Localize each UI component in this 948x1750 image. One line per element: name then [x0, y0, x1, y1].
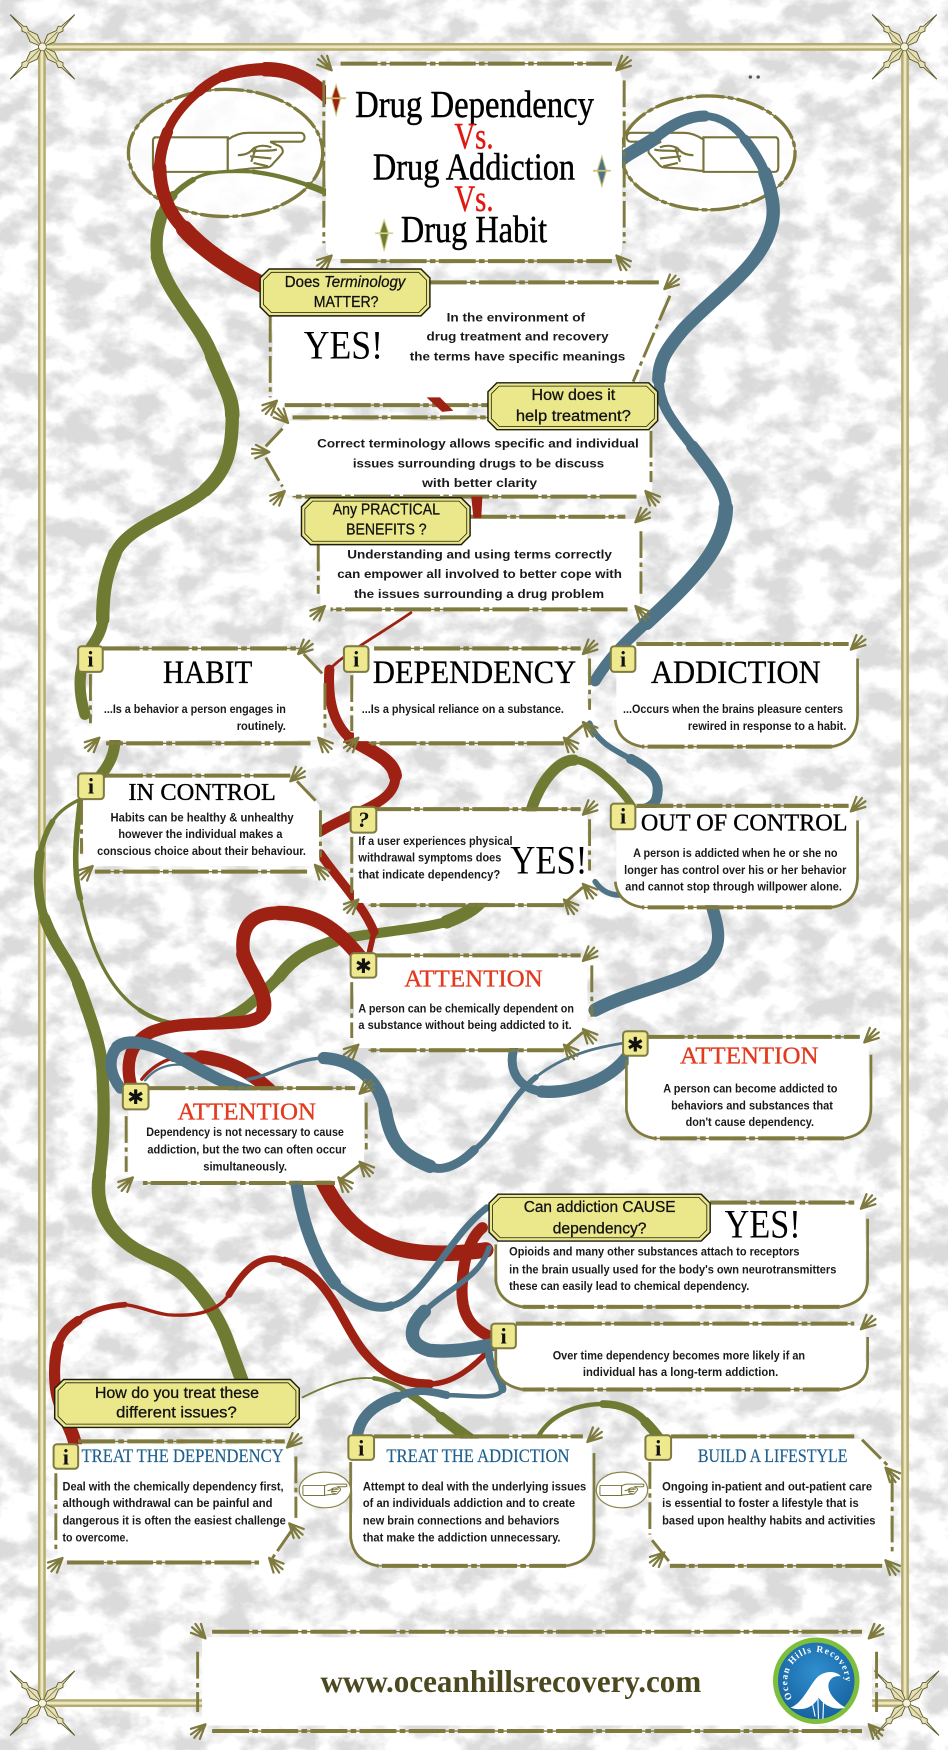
- ribbon: red dependency thread: [55, 69, 491, 1448]
- panel: treat the dependency: [48, 1433, 304, 1573]
- body text: with better clarity: [421, 477, 538, 490]
- right oval with pointing hand: [621, 96, 795, 210]
- panel: out of control: [611, 797, 865, 907]
- body text: dangerous it is often the easiest challenge: [63, 1515, 286, 1528]
- icon: title ribbon knots: [326, 85, 611, 251]
- body text: Understanding and using terms correctly: [347, 549, 612, 562]
- big yes: YES!: [510, 837, 587, 882]
- body text: [623, 703, 846, 733]
- icon: question badge: [351, 807, 376, 833]
- badge: does terminology matter: MATTER?: [314, 294, 379, 311]
- badge: can addiction cause dependency: Can addiction CAUSE: [524, 1199, 676, 1216]
- icon: info badge: i: [655, 1435, 661, 1460]
- body text: withdrawal symptoms does: [357, 852, 502, 865]
- panel: habit: [78, 640, 333, 752]
- body text: Habits can be healthy & unhealthy: [111, 811, 294, 824]
- website url: www.oceanhillsrecovery.com: [320, 1664, 701, 1699]
- logo: ocean hills recovery: Ocean Hills Recovery: [782, 1646, 850, 1700]
- badge: does terminology matter: [260, 269, 430, 316]
- body text: to overcome.: [63, 1531, 128, 1544]
- icon: info badge: [491, 1324, 516, 1349]
- body text: routinely.: [237, 720, 286, 733]
- panel: dependency: [344, 640, 597, 752]
- panel: website footer: [190, 1622, 884, 1740]
- body text: Attempt to deal with the underlying issues: [363, 1481, 587, 1494]
- icon: asterisk badge: [351, 953, 376, 978]
- icon: info badge: [54, 1444, 78, 1469]
- body text: [63, 1481, 286, 1544]
- badge: any practical benefits: [301, 498, 470, 545]
- body text: [358, 1002, 574, 1032]
- body text: although withdrawal can be painful and: [63, 1497, 272, 1510]
- badge: how do you treat: How do you treat these: [95, 1385, 259, 1402]
- body text: In the environment of: [447, 311, 585, 324]
- panel: in control: [78, 767, 329, 881]
- icon: info badge: i: [353, 646, 359, 671]
- icon: info badge: i: [620, 646, 626, 671]
- body text: individual has a long-term addiction.: [583, 1366, 778, 1379]
- body text: [624, 847, 847, 894]
- body text: can empower all involved to better cope with: [337, 568, 622, 581]
- icon: question badge: ?: [358, 807, 369, 832]
- heading: ATTENTION: [680, 1043, 819, 1070]
- heading: DEPENDENCY: [373, 655, 576, 691]
- body text: [146, 1126, 347, 1174]
- icon: info badge: [348, 1435, 374, 1460]
- badge: can addiction cause dependency: dependency?: [553, 1220, 647, 1237]
- body text: issues surrounding drugs to be discuss: [353, 458, 605, 471]
- heading: ATTENTION: [404, 966, 543, 993]
- icon: small hand left: [299, 1472, 351, 1508]
- body text: is essential to foster a lifestyle that is: [662, 1497, 859, 1510]
- body text: simultaneously.: [203, 1161, 287, 1174]
- body text: [357, 835, 513, 881]
- icon: info badge: i: [500, 1324, 507, 1349]
- body text: Dependency is not necessary to cause: [146, 1126, 344, 1139]
- panel: how does it help: [249, 408, 660, 506]
- panel: over time: [491, 1315, 875, 1390]
- icon: info badge: [344, 646, 368, 672]
- heading: ADDICTION: [651, 655, 821, 691]
- title text: [355, 84, 594, 251]
- icon: info badge: i: [88, 774, 94, 799]
- body text: [553, 1349, 805, 1379]
- body text: however the individual makes a: [118, 828, 283, 841]
- panel: can addiction cause dependency: [496, 1194, 875, 1307]
- panel: withdrawal question: [344, 800, 597, 914]
- body text: in the brain usually used for the body's own neurotransmitters: [509, 1263, 837, 1276]
- icon: info badge: [611, 804, 635, 829]
- badge: how do you treat: different issues?: [116, 1404, 237, 1421]
- heading: TREAT THE ADDICTION: [386, 1446, 570, 1467]
- panel: title: [317, 56, 631, 270]
- body text: [662, 1481, 876, 1528]
- body text: ...Is a behavior a person engages in: [104, 703, 286, 716]
- body text: these can easily lead to chemical dependency.: [509, 1280, 749, 1293]
- ribbon: blue addiction thread: [111, 116, 773, 1436]
- body text: Opioids and many other substances attach to receptors: [509, 1246, 800, 1259]
- body text: [410, 311, 626, 363]
- body text: that make the addiction unnecessary.: [363, 1531, 561, 1544]
- icon: info badge: [645, 1435, 671, 1460]
- badge: does terminology matter: Does Terminology: [285, 274, 406, 291]
- heading: BUILD A LIFESTYLE: [698, 1446, 848, 1467]
- icon: small hand right: [596, 1472, 648, 1508]
- left oval with pointing hand: [128, 89, 323, 217]
- panel: does terminology matter: [262, 275, 679, 415]
- body text: don't cause dependency.: [686, 1116, 814, 1129]
- body text: conscious choice about their behaviour.: [97, 845, 306, 858]
- body text: that indicate dependency?: [358, 868, 500, 881]
- body text: Correct terminology allows specific and individual: [317, 438, 639, 451]
- badge: how does it help treatment: [488, 383, 658, 430]
- heading: HABIT: [163, 655, 253, 691]
- badge: any practical benefits: Any PRACTICAL: [333, 502, 440, 519]
- body text: [337, 549, 622, 601]
- heading: TREAT THE DEPENDENCY: [82, 1446, 284, 1467]
- title text: Vs.: [454, 115, 494, 156]
- body text: [104, 703, 286, 733]
- badge: how do you treat: [55, 1379, 299, 1427]
- big yes: YES!: [725, 1202, 801, 1247]
- body text: Over time dependency becomes more likely if an: [553, 1349, 805, 1362]
- heading: ATTENTION: [178, 1098, 316, 1125]
- heading: OUT OF CONTROL: [641, 809, 848, 836]
- icon: info badge: [78, 646, 103, 672]
- body text: longer has control over his or her behavior: [624, 864, 847, 877]
- title text: Drug Dependency: [355, 84, 594, 126]
- body text: Deal with the chemically dependency first,: [63, 1481, 284, 1494]
- body text: the issues surrounding a drug problem: [354, 588, 604, 601]
- logo: ocean hills recovery: [772, 1638, 860, 1724]
- body text: If a user experiences physical: [358, 835, 513, 848]
- title text: Drug Habit: [401, 209, 548, 251]
- body text: [317, 438, 639, 490]
- icon: asterisk badge: ✱: [627, 1032, 644, 1056]
- body text: Ongoing in-patient and out-patient care: [662, 1481, 873, 1494]
- body text: rewired in response to a habit.: [688, 720, 846, 733]
- body text: [663, 1083, 837, 1129]
- icon: info badge: i: [358, 1435, 364, 1460]
- body text: A person can become addicted to: [663, 1083, 837, 1096]
- icon: info badge: i: [63, 1444, 69, 1469]
- panel: attention behaviours: [623, 1028, 879, 1138]
- body text: the terms have specific meanings: [410, 350, 626, 363]
- panel: treat the addiction: [348, 1427, 602, 1566]
- body text: A person can be chemically dependent on: [358, 1002, 574, 1015]
- ribbon: olive habit thread: [38, 171, 659, 1442]
- body text: of an individuals addiction and to create: [363, 1497, 576, 1510]
- body text: addiction, but the two can often occur: [147, 1143, 347, 1156]
- body text: [97, 811, 306, 858]
- icon: info badge: [78, 773, 104, 799]
- icon: asterisk badge: [623, 1031, 648, 1056]
- panel: practical benefits: [310, 508, 650, 621]
- body text: [363, 1481, 587, 1544]
- badge: how does it help treatment: help treatment?: [516, 408, 631, 425]
- body text: A person is addicted when he or she no: [633, 847, 837, 860]
- icon: asterisk badge: [123, 1084, 149, 1109]
- body text: new brain connections and behaviors: [363, 1515, 560, 1528]
- body text: a substance without being addicted to it.: [358, 1019, 572, 1032]
- icon: asterisk badge: ✱: [127, 1085, 144, 1109]
- badge: how does it help treatment: How does it: [532, 387, 616, 404]
- body text: [509, 1246, 837, 1293]
- body text: drug treatment and recovery: [427, 330, 609, 343]
- icon: info badge: i: [87, 646, 94, 671]
- body text: ...Occurs when the brains pleasure centers: [623, 703, 843, 716]
- big yes: YES!: [304, 322, 383, 367]
- heading: IN CONTROL: [128, 779, 276, 806]
- panel: attention chemically dependent: [344, 946, 597, 1059]
- body text: ...Is a physical reliance on a substance.: [362, 703, 564, 716]
- title text: Vs.: [454, 178, 494, 219]
- body text: based upon healthy habits and activities: [662, 1515, 876, 1528]
- panel: addiction: [611, 635, 865, 747]
- panel: build a lifestyle: [645, 1435, 900, 1575]
- body text: behaviors and substances that: [671, 1099, 833, 1112]
- icon: asterisk badge: ✱: [355, 954, 372, 978]
- title text: Drug Addiction: [373, 147, 575, 189]
- icon: info badge: [611, 646, 635, 672]
- body text: and cannot stop through willpower alone.: [625, 881, 842, 894]
- badge: any practical benefits: BENEFITS ?: [346, 522, 427, 539]
- icon: info badge: i: [620, 804, 626, 829]
- badge: can addiction cause dependency: [489, 1194, 710, 1241]
- panel: attention not necessary: [118, 1079, 374, 1192]
- ribbon fragments between panels: [427, 397, 482, 518]
